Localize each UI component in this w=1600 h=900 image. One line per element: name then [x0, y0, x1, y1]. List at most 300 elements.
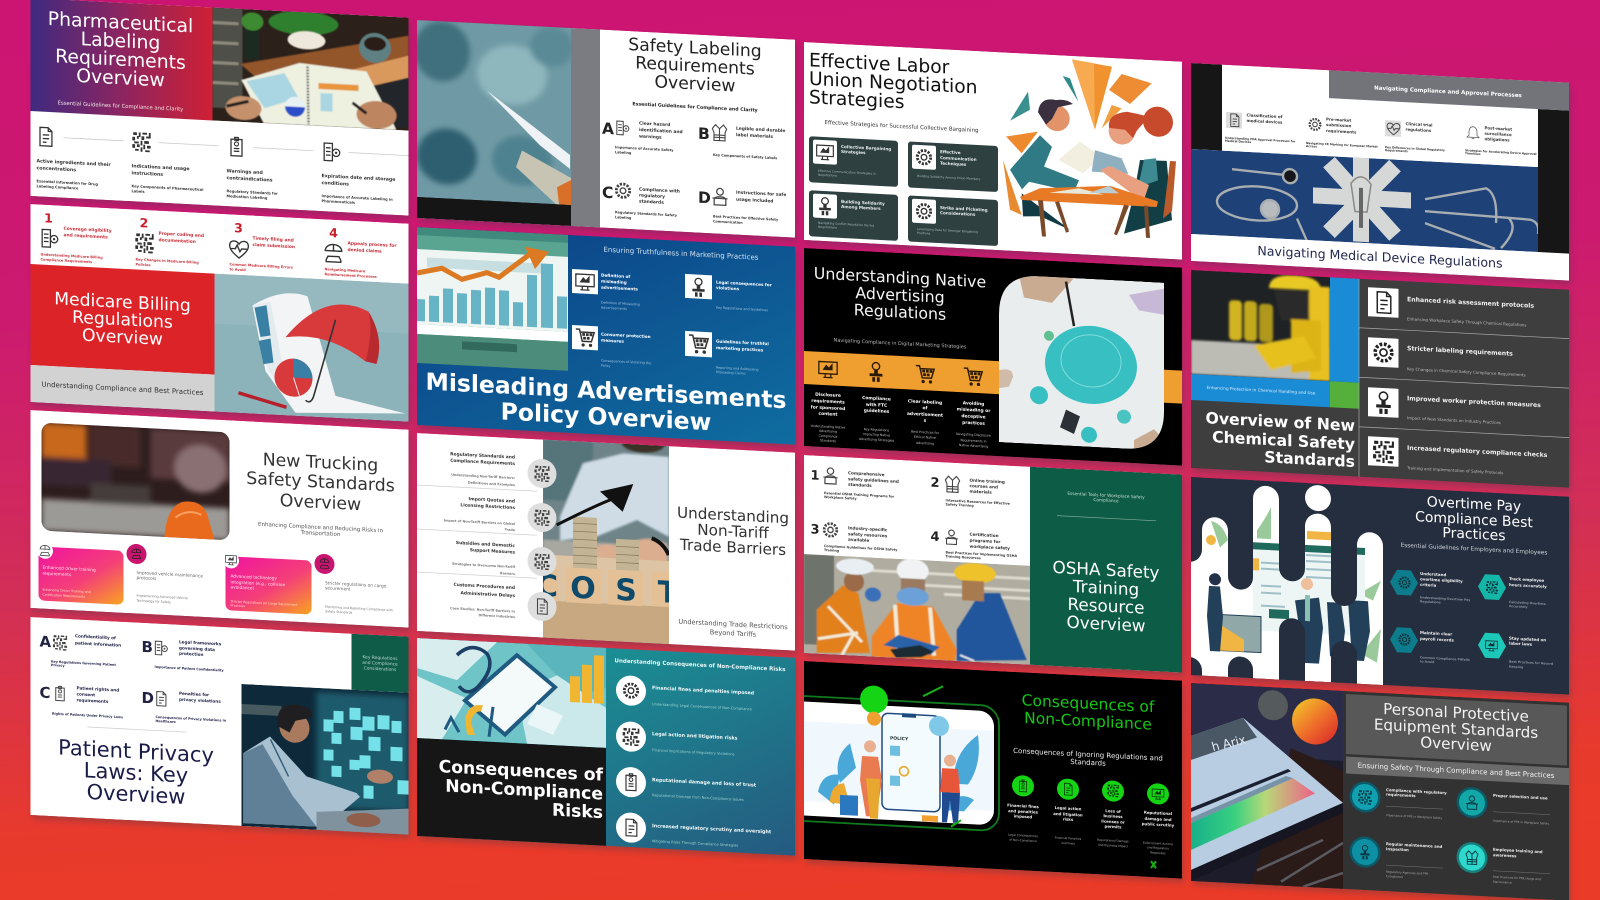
item 4 text: Best Practices for Record — [1509, 660, 1553, 666]
slide title: Equipment Standards — [1374, 716, 1538, 742]
item icons — [40, 127, 340, 162]
item 1 text: Regulations — [1420, 599, 1441, 604]
panel subtitle: Understanding Compliance and Best Practices — [42, 381, 204, 397]
column 1 text: content — [818, 411, 838, 418]
item 3 — [616, 766, 757, 804]
photo: doctor with digital security screen — [242, 684, 408, 835]
slide title: Strategies — [809, 87, 904, 113]
item D text: Consequences of Privacy Violations in — [156, 715, 227, 723]
slide title: Chemical Safety — [1212, 427, 1355, 454]
grey band — [571, 28, 600, 228]
slide: OSHA Safety Training Resource Overview — [804, 455, 1184, 677]
item 3 text: Medication Labeling — [227, 194, 268, 200]
dark pill overlays — [1176, 426, 1357, 726]
column 4 text: Responses — [1150, 851, 1166, 855]
green icon circles — [1012, 775, 1169, 805]
item 4 — [616, 812, 772, 850]
slide subtitle: Effective Strategies for Successful Collective Bargaining — [824, 120, 979, 134]
item 4: Post-market — [1484, 125, 1512, 132]
panel subtitle: Essential Guidelines for Compliance and Clarity — [58, 100, 183, 113]
card 1: Enhanced driver training — [43, 565, 96, 573]
title panel — [30, 0, 212, 120]
column 2 text: Financial Penalties — [1055, 836, 1082, 841]
item: definition: Definition of Misleading — [601, 301, 640, 307]
card 1: requirements — [43, 571, 72, 578]
item letters: C — [40, 683, 51, 702]
item numbers: 4 — [329, 225, 338, 240]
item 2: Improved vehicle maintenance — [136, 570, 203, 579]
slide title: Risks — [552, 801, 603, 823]
box caption: and Compliance — [362, 660, 398, 668]
panel subtitle: Compliance — [1093, 497, 1119, 504]
item 1 text: Understanding Overtime Pay — [1420, 595, 1470, 602]
item 2: Pre-market — [1326, 117, 1351, 123]
item D text: usage included — [736, 197, 773, 205]
slide: Medicare Billing Regulations Overview — [30, 204, 410, 426]
column 4 note: Requirements in — [960, 438, 987, 443]
panel title: Pharmaceutical — [48, 9, 193, 37]
item 4 text: denied claims — [348, 247, 382, 255]
item 3: regulations — [1406, 127, 1432, 133]
headline: Policy Overview — [501, 397, 711, 436]
item 3: Reputational damage and loss of trust — [652, 777, 757, 789]
item 3 text: Common Compliance Pitfalls — [1420, 655, 1470, 662]
column 4 note: Native Advertising — [959, 443, 988, 449]
item 2 — [616, 721, 738, 757]
item C text: Rights of Patients Under Privacy Laws — [52, 712, 123, 719]
card: solidarity: Building Solidarity — [841, 199, 885, 206]
item 1 text: Comprehensive — [848, 470, 885, 477]
item D text: privacy violations — [179, 697, 221, 704]
item: consumer protection: Consumer protection — [601, 332, 651, 339]
column 3 text: of — [923, 405, 928, 411]
item 2 text: materials — [970, 489, 992, 495]
slide: Overtime Pay Compliance Best Practices — [1176, 426, 1571, 743]
item 4 text: labor laws — [1509, 641, 1533, 647]
panel title: OSHA Safety — [1052, 557, 1160, 582]
item 3 text: Warnings and — [227, 168, 263, 176]
card 1 — [37, 542, 124, 605]
slide title: Standards — [1264, 447, 1355, 471]
panel title: Training — [1072, 576, 1139, 599]
item 3 — [1350, 836, 1443, 881]
column 3 note: Ethical Native — [914, 435, 936, 440]
card: communication: Building Solidarity Among Union Members — [917, 174, 981, 181]
item 3 text: Training — [824, 548, 840, 553]
column 2 text: with FTC — [866, 402, 887, 409]
item 1 — [1350, 781, 1447, 820]
photo: tablet with bar chart and apple — [1191, 683, 1343, 889]
item 2: Financial Implications of Regulatory Violations — [652, 748, 735, 757]
item 3 text: Strategies to Overcome Non-Tariff — [452, 562, 515, 569]
card 3: Practices — [230, 603, 245, 608]
item 2 text: Labels — [132, 189, 145, 194]
illustration: arguing couple — [1003, 56, 1176, 243]
item 4: surveillance — [1484, 131, 1512, 137]
item: definition: Advertisements — [601, 306, 627, 311]
grey header band — [1329, 70, 1569, 111]
header text: Navigating Compliance and Approval Processes — [1374, 86, 1523, 99]
item 2 text: courses and — [970, 483, 998, 490]
item 2 text: documentation — [158, 237, 196, 245]
photo: coins and COST blocks: T — [658, 575, 679, 611]
slide: Safety Labeling Requirements Overview — [414, 20, 797, 242]
column 1 text: Financial fines — [1007, 803, 1040, 809]
item 1: Medical Devices — [1225, 139, 1251, 144]
item: consumer protection: Consequences of Violating the — [601, 359, 651, 365]
red title panel — [30, 264, 214, 375]
item 1 text: Regulatory Standards and — [450, 451, 515, 461]
card: communication: Effective — [940, 149, 961, 155]
item A text: Privacy — [51, 663, 65, 668]
item 4 text: workplace safety — [970, 544, 1010, 551]
item 2 text: instructions — [132, 170, 163, 178]
item 4 — [1456, 841, 1550, 887]
item icons — [823, 468, 960, 545]
photo: planning diagram with hands — [999, 274, 1164, 451]
subtitle: Understanding Trade Restrictions — [678, 618, 788, 631]
column 2 text: and litigation — [1053, 811, 1083, 818]
slide title: Advertising — [855, 283, 945, 307]
column 4 text: Avoiding — [963, 400, 984, 407]
row 1: Enhanced risk assessment protocols — [1407, 296, 1534, 310]
item: definition — [572, 269, 640, 312]
slide: Misleading Advertisements Policy Overview — [417, 227, 797, 449]
photo: notebook on desk — [212, 6, 408, 131]
item 4: Maintenance — [1493, 880, 1512, 885]
photo: blurred truck with orange glove — [42, 423, 230, 540]
card: communication: Techniques — [940, 161, 967, 167]
green panel — [1030, 467, 1182, 673]
item 3 text: payroll records — [1420, 636, 1455, 643]
row dividers — [1359, 279, 1569, 488]
item 4: awareness — [1493, 852, 1517, 858]
item 1: Compliance with regulatory — [1386, 787, 1447, 795]
item: guidelines: Misleading Claims — [716, 370, 746, 376]
item 1: requirements — [1386, 792, 1416, 798]
item 3: inspection — [1386, 846, 1409, 852]
green accent block — [1330, 381, 1359, 409]
item 3 text: Regulatory Standards for — [227, 189, 278, 196]
item 3 text: Compliance Guidelines for OSHA Safety — [824, 544, 898, 552]
item numbers: 2 — [930, 476, 940, 491]
slide title: Practices — [1442, 525, 1506, 544]
card: communication — [908, 141, 998, 192]
slide title: Patient Privacy — [58, 734, 214, 768]
column 4 text: misleading or — [957, 406, 991, 414]
item: guidelines: Reporting and Addressing — [716, 366, 759, 372]
slide subtitle: Essential Guidelines for Compliance and Clarity — [632, 101, 758, 114]
item A text: Confidentiality of — [75, 633, 116, 640]
item 4 text: Importance of Accurate Labeling in — [322, 194, 393, 202]
slide title: New Trucking — [263, 450, 378, 476]
slide title: Safety Standards — [246, 469, 395, 496]
slide: New Trucking Safety Standards Overview — [30, 410, 410, 632]
slide: Patient Privacy Laws Key Overview — [30, 617, 410, 839]
item 4: Employee training and — [1493, 847, 1543, 854]
item letters: A — [602, 120, 614, 138]
item 2 text: Interactive Resources for Effective — [946, 498, 1011, 506]
item D text: Communication — [713, 219, 743, 225]
item: definition: advertisements — [601, 285, 638, 292]
item 4 text: Best Practices for Implementing OSHA — [946, 550, 1017, 558]
illustration: policy phone with two people — [774, 680, 999, 831]
photo: tablet with bar chart and apple: h Arix — [1210, 733, 1247, 754]
item A text: Clear hazard — [639, 121, 670, 128]
item 3: Regulatory Agencies and PPE — [1386, 870, 1428, 876]
item 4 text: Case Studies: Non-Tariff Barriers in — [450, 606, 516, 614]
slide title: Understanding — [677, 504, 789, 527]
item 4 text: Appeals process for — [348, 240, 397, 249]
slide title: Safety Labeling — [628, 35, 762, 62]
item: guidelines — [685, 331, 769, 377]
slide: Consequences of Non-Compliance Risks — [417, 638, 797, 860]
slide title: Consequences of — [1022, 691, 1155, 716]
slide title: Personal Protective — [1383, 700, 1529, 726]
item 1: Understanding FDA Approval Processes for — [1225, 136, 1296, 143]
item B text: governing data — [179, 645, 215, 652]
item 4 text: Reimbursement Processes — [324, 272, 377, 279]
slide title: Understanding Native — [814, 264, 986, 291]
card: strike: Positions — [917, 231, 931, 236]
illustration: office people in pill shapes — [1191, 478, 1383, 733]
item 1: Importance of PPE in Workplace Safety — [1386, 813, 1442, 820]
slide title: Union Negotiation — [809, 69, 978, 99]
subtitle: Consequences of Ignoring Regulations and — [1013, 747, 1163, 763]
item D text: Instructions for safe — [736, 190, 786, 198]
green squiggles — [923, 685, 1156, 868]
illustration: policy phone with two people: POLICY — [890, 735, 909, 742]
band icons — [819, 360, 982, 387]
subtitle: Standards — [1070, 758, 1106, 768]
item 4 text: Navigating Medicare — [324, 267, 366, 273]
item 1: Classification of — [1246, 112, 1283, 119]
item 3 text: safety resources — [848, 531, 888, 538]
column 3 note: Advertising — [916, 441, 934, 446]
column 4 text: damage and — [1144, 816, 1172, 822]
item letters: A — [40, 632, 51, 651]
card 3: integration (e.g., collision — [230, 579, 286, 588]
item 2 text: Accurately — [1509, 604, 1528, 609]
slide: Understanding Non-Tariff Trade Barriers — [417, 421, 797, 655]
card: solidarity: Navigating Conflict Resolution During — [818, 221, 874, 228]
black title panel — [417, 738, 606, 846]
card: collective bargaining — [809, 136, 898, 187]
column 1 note: Compliance — [819, 434, 837, 439]
item A text: Importance of Accurate Safety — [615, 145, 674, 152]
item 4 — [1465, 126, 1536, 156]
item 4 text: Customs Procedures and — [453, 582, 515, 591]
item 2 text: Import Quotas and — [469, 496, 515, 505]
item 1 text: Active ingredients and their — [37, 158, 111, 168]
item: legal consequences: Key Regulations and Guidelines — [716, 306, 768, 312]
card 3: avoidance) — [230, 584, 255, 592]
item 3: Compliance — [1386, 874, 1403, 879]
item 1 text: Definitions and Examples — [468, 481, 515, 487]
item 2 — [1306, 118, 1378, 148]
item 1: Financial fines and penalties imposed — [652, 685, 755, 697]
item 4 text: Stay updated on — [1509, 636, 1546, 642]
item 2 text: Proper coding and — [158, 231, 204, 239]
column 1 text: requirements — [811, 398, 845, 406]
item 3 text: available — [848, 537, 869, 543]
column 1 text: and penalties — [1008, 808, 1039, 815]
card: solidarity: Among Members — [841, 204, 881, 211]
dividers — [417, 485, 537, 578]
photo: coins and COST blocks — [536, 427, 679, 645]
column 1 text: Disclosure — [815, 392, 841, 399]
item A text: identification and — [639, 127, 683, 135]
item 2: Access — [1306, 144, 1317, 149]
row 3: Impact of New Standards on Industry Practices — [1407, 415, 1501, 425]
column 4 note: Navigating Disclosure — [956, 432, 991, 438]
item 1 text: and requirements — [64, 232, 108, 241]
card 3: Stricter Regulations on Cargo Securement — [230, 599, 298, 607]
item 4: Mitigating Risks Through Compliance Strategies — [652, 839, 738, 848]
isometric illustration — [417, 638, 606, 748]
photo: coins and COST blocks: C — [536, 569, 558, 605]
green box — [352, 634, 408, 693]
item 1 text: Workplace Safety — [824, 495, 857, 501]
item 1 text: Labeling Compliance — [37, 184, 79, 191]
card: strike: Considerations — [940, 210, 976, 217]
row 2 — [1368, 337, 1526, 377]
item 3 text: Maintain clear — [1420, 630, 1452, 637]
slide title: Non-Compliance — [1024, 709, 1152, 734]
subtitle: Essential Guidelines for Employers and Employees — [1401, 543, 1547, 557]
slide: Navigating Medical Device Regulations — [1191, 63, 1571, 285]
item numbers: 4 — [930, 530, 940, 545]
item numbers: 1 — [810, 468, 820, 484]
slide: Overview of New Chemical Safety Standards — [1191, 270, 1571, 492]
item 4 text: programs for — [970, 538, 1001, 544]
slide title: Consequences of — [439, 757, 604, 786]
item 2 text: Trade — [505, 528, 516, 532]
card: strike — [908, 195, 998, 246]
photo: three workers in PPE — [804, 553, 1030, 665]
item A text: warnings — [639, 134, 662, 141]
column 3 text: business — [1103, 813, 1123, 819]
grey subtitle band — [30, 365, 214, 412]
item numbers: 1 — [44, 210, 53, 226]
item C text: Compliance with — [639, 187, 680, 195]
item 2: Technology for Safety — [136, 598, 171, 604]
item icons — [616, 119, 728, 205]
slide title: Laws: Key — [84, 757, 188, 788]
item 1 text: overtime eligibility — [1420, 576, 1463, 584]
row 3 — [1368, 387, 1541, 427]
card 3: Advanced technology — [230, 573, 277, 582]
column 4 text: Reputational — [1144, 810, 1172, 816]
item B text: label materials — [736, 132, 773, 140]
item 4 text: Training Resources — [946, 554, 981, 560]
column 3 text: permits — [1105, 824, 1122, 830]
item 2: requirements — [1326, 128, 1357, 135]
item letters: D — [142, 689, 154, 707]
item 2 text: Key Changes in Medicare Billing — [136, 257, 199, 265]
item 1 text: Essential OSHA Training Programs for — [824, 491, 895, 499]
slide title: Requirements — [635, 53, 755, 80]
item B text: Legal frameworks — [179, 639, 222, 646]
panel title: Requirements — [55, 46, 186, 74]
caption text: Enhancing Protection in Chemical Handling and Use — [1207, 385, 1316, 395]
card: collective bargaining: Collective Bargaining — [841, 144, 891, 152]
subtitle: Ensuring Safety Through Compliance and Best Practices — [1358, 762, 1555, 780]
item 1: Understanding Legal Consequences of Non-Compliance — [652, 702, 753, 711]
item 4: Monitoring and Reporting Compliance with — [325, 605, 393, 612]
item 4 text: Certification — [970, 532, 999, 538]
item: consumer protection: measures — [601, 338, 624, 344]
item 1 text: Understanding Medicare Billing — [41, 253, 103, 260]
item 1 text: Compliance Requirements — [450, 458, 515, 467]
item 4: Strategies for Accelerating Device Approval — [1465, 148, 1537, 156]
slide: Personal Protective Equipment Standards Overview — [1191, 683, 1571, 900]
box caption: Key Regulations — [362, 654, 398, 662]
item 1 — [1225, 112, 1296, 144]
column 2 text: risks — [1063, 816, 1074, 822]
item 4 text: Pharmaceuticals — [322, 199, 355, 205]
slide title: Non-Tariff — [697, 521, 769, 542]
item 1 text: concentrations — [37, 165, 76, 173]
item A text: patient information — [75, 640, 121, 648]
item 2 text: Indications and usage — [132, 163, 190, 172]
item 1: medical devices — [1246, 118, 1283, 125]
item 1 — [616, 675, 755, 712]
item 4: Best Practices for PPE Usage and — [1493, 875, 1541, 881]
slide: Effective Labor Union Negotiation Strategies — [804, 42, 1184, 264]
item 3 text: Barriers — [500, 571, 515, 576]
item B text: Key Components of Safety Labels — [713, 153, 777, 160]
column 3 text: licenses or — [1101, 818, 1125, 825]
item 4 text: Expiration date and storage — [322, 173, 395, 183]
headline: Misleading Advertisements — [425, 367, 787, 414]
item numbers: 3 — [810, 522, 820, 538]
column 3 note: Best Practices for — [911, 430, 940, 435]
item: guidelines: Guidelines for truthful — [716, 339, 769, 346]
item 2 text: Licensing Restrictions — [460, 502, 515, 511]
column 1 note: Standards — [820, 438, 836, 443]
panel title: Medicare Billing — [54, 289, 191, 316]
column 1 text: of Non-Compliance — [1009, 838, 1037, 843]
slide title: Effective Labor — [809, 50, 950, 79]
item 4 text: Administrative Delays — [461, 590, 515, 599]
item 4 text: Keeping — [1509, 665, 1523, 669]
column 1 text: for sponsored — [811, 404, 845, 412]
row 2: Key Changes in Chemical Safety Compliance Requirements — [1407, 366, 1526, 377]
card: solidarity: Negotiations — [818, 225, 837, 230]
panel title: Overview — [76, 66, 165, 91]
item D text: Healthcare — [156, 719, 177, 724]
panel title: Overview — [1066, 612, 1146, 636]
item C text: Labeling — [615, 215, 632, 220]
photo: worker in yellow suit — [1191, 270, 1330, 381]
item 1 text: standards — [848, 482, 872, 488]
item 2 text: Key Components of Pharmaceutical — [132, 184, 203, 192]
column 3 text: Reputational Damage — [1097, 838, 1129, 843]
divider — [88, 727, 186, 732]
item 2 text: Policies — [136, 262, 151, 267]
column 4 text: and Regulatory — [1147, 845, 1169, 850]
panel divider — [1057, 516, 1156, 521]
blue caption band — [1191, 374, 1330, 407]
photo: surgical instruments on blue cloth — [1191, 148, 1538, 253]
item 3: Clinical trial — [1406, 121, 1433, 128]
card: collective bargaining: Strategies — [841, 149, 866, 155]
item 2 text: hours accurately — [1509, 582, 1547, 589]
item 4: Increased regulatory scrutiny and oversight — [652, 823, 772, 835]
item 1 text: Compliance Requirements — [41, 258, 92, 264]
column 1 text: Legal Consequences — [1008, 833, 1038, 838]
